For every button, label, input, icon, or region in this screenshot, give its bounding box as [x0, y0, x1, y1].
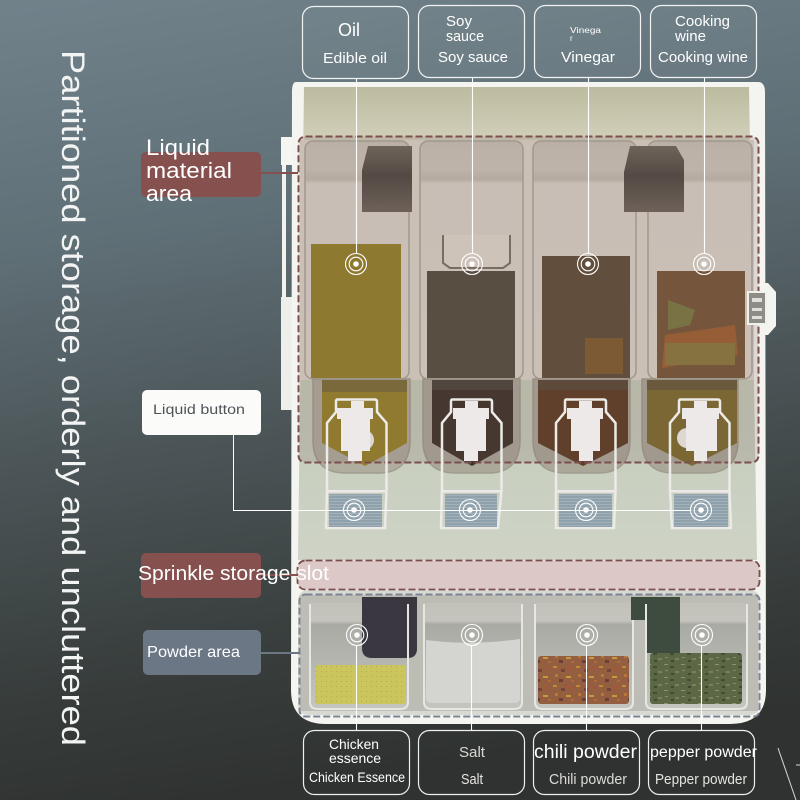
liquid material area label: Liquid	[146, 135, 210, 160]
label: chili powder	[534, 730, 640, 794]
liquid material area label	[141, 135, 298, 206]
label: cooking wine: wine	[674, 28, 706, 45]
sprinkle storage slot	[298, 560, 760, 590]
label: vinegar	[534, 6, 640, 78]
bottle 4 cooking wine	[624, 140, 754, 473]
label: vinegar: r	[570, 34, 573, 43]
liquid material area label: material	[146, 158, 232, 183]
label: chicken essence: Chicken	[329, 736, 379, 752]
label: cooking wine: Cooking	[675, 13, 730, 30]
label: soy sauce: sauce	[446, 28, 484, 45]
label: chicken essence: essence	[329, 750, 381, 766]
label: chicken essence	[304, 730, 410, 794]
label: soy sauce: Soy	[446, 13, 472, 30]
label: oil: Edible oil	[323, 50, 387, 67]
corner accent	[778, 748, 800, 800]
powder area label: Powder area	[147, 644, 240, 661]
sprinkle storage slot label: Sprinkle storage slot	[138, 563, 329, 585]
label: chili powder: chili powder	[534, 742, 638, 763]
jar 2 salt	[424, 603, 522, 709]
label: oil: Oil	[338, 20, 360, 40]
label: cooking wine	[650, 6, 756, 78]
label: pepper powder: Pepper powder	[655, 772, 747, 788]
bottle 3 vinegar	[530, 140, 646, 473]
liquid material area outline	[298, 136, 758, 462]
label: pepper powder: pepper powder	[650, 744, 757, 761]
leader lines top	[356, 77, 704, 254]
side rail left	[281, 137, 297, 410]
jar 3 chili powder	[535, 603, 633, 709]
targets: powder jars	[346, 624, 712, 646]
label: salt	[418, 730, 524, 794]
label: pepper powder	[648, 730, 757, 794]
label: cooking wine: Cooking wine	[658, 49, 748, 66]
label: oil	[302, 6, 408, 78]
button 4	[670, 400, 731, 528]
panel: bottles	[300, 140, 754, 473]
leader lines bottom	[356, 645, 702, 730]
jar 1 chicken essence	[310, 597, 417, 709]
panel: powder jars	[300, 595, 758, 711]
bottle 1 oil	[300, 140, 418, 473]
label: chili powder: Chili powder	[549, 772, 627, 788]
button 3	[556, 400, 616, 528]
label: vinegar: Vinegar	[561, 49, 615, 66]
side clip right	[760, 283, 776, 335]
label: salt: Salt	[461, 771, 484, 788]
liquid material area label: area	[146, 181, 193, 206]
button 1	[326, 400, 387, 528]
clip code tag	[748, 292, 766, 324]
label: salt: Salt	[459, 744, 486, 761]
liquid buttons	[326, 400, 731, 528]
vertical title: Partitioned storage, orderly and uncluttered	[55, 50, 91, 746]
label: vinegar: Vinega	[570, 26, 602, 35]
targets: liquid bottles	[346, 254, 714, 274]
powder area label	[143, 630, 300, 675]
label: soy sauce: Soy sauce	[438, 49, 508, 66]
bottle 2 soy sauce	[416, 140, 530, 473]
jar 4 pepper powder	[631, 597, 747, 709]
targets: buttons	[344, 500, 712, 520]
storage tray	[291, 82, 766, 724]
liquid button label	[142, 390, 690, 510]
powder area outline	[300, 594, 760, 716]
button 2	[441, 400, 502, 528]
label: chicken essence: Chicken Essence	[309, 769, 405, 785]
sprinkle storage slot label	[138, 553, 329, 598]
label: soy sauce	[418, 6, 524, 78]
liquid button label: Liquid button	[153, 402, 245, 417]
